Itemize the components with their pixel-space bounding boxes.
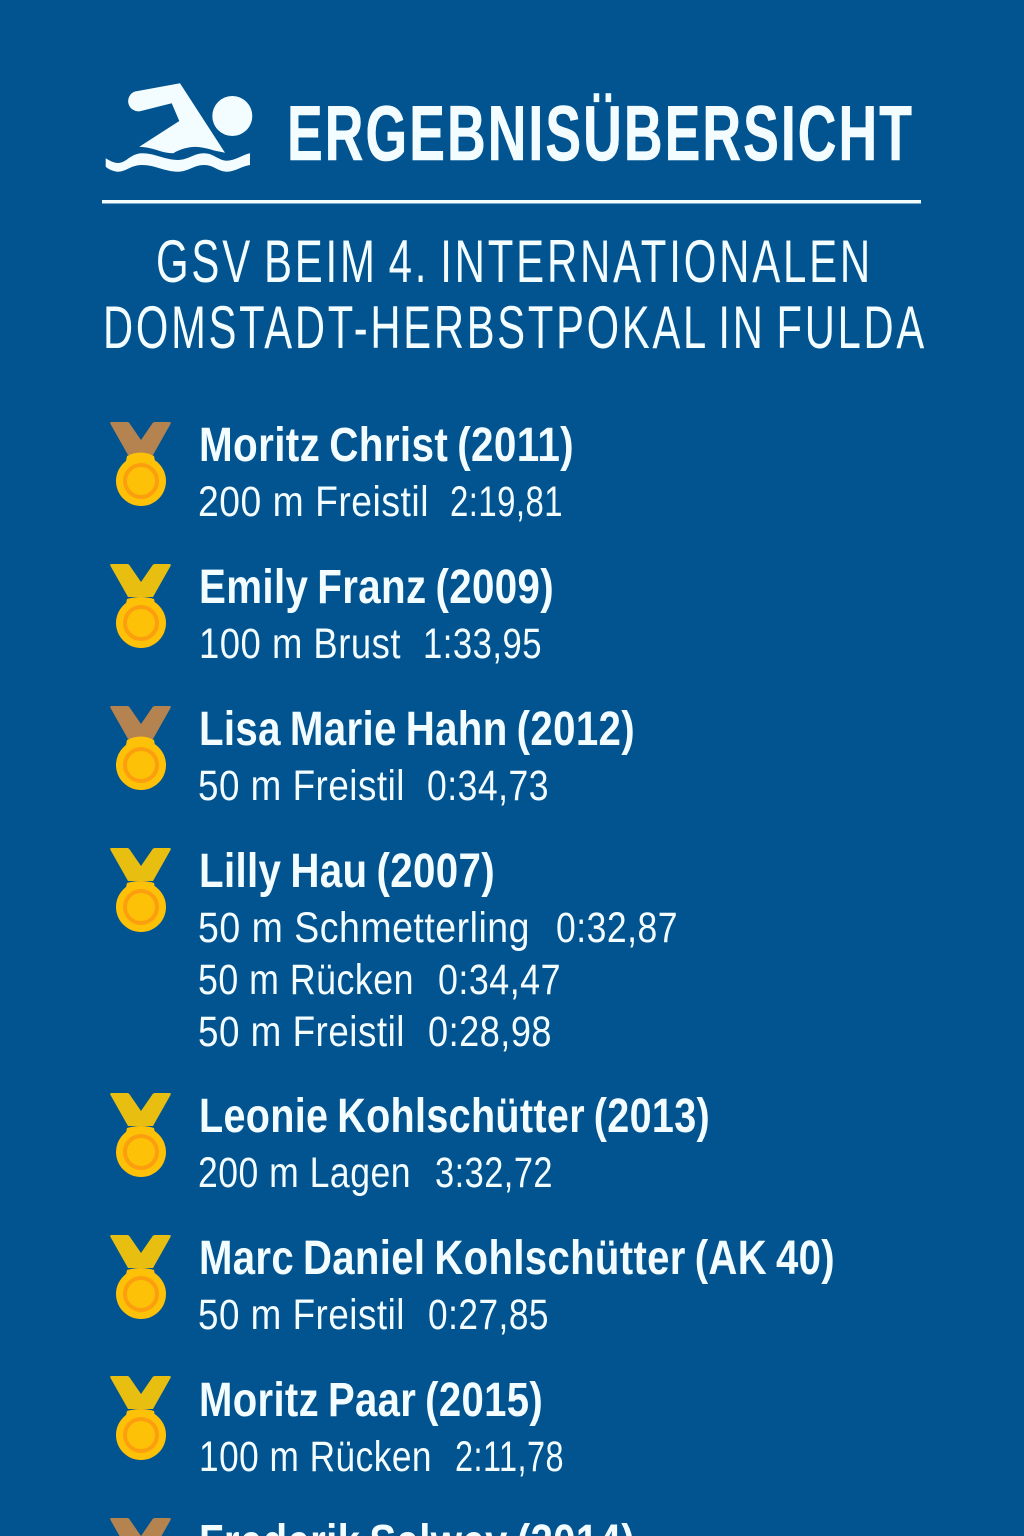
icon: gold ribbon medal [110,1376,171,1460]
result: Emily Franz: Emily Franz (2009) [199,561,554,614]
result: Moritz Paar: 100 m Rücken [199,1433,432,1481]
result: Lilly Hau: Lilly Hau (2007) [199,845,495,898]
result: Leonie Kohlschütter [110,1090,710,1197]
result: Moritz Christ: 200 m Freistil [198,478,429,526]
result: Marc Daniel Kohlschütter: 0:27,85 [428,1291,549,1339]
result: Leonie Kohlschütter: 3:32,72 [435,1149,553,1197]
icon: swimmer [106,83,252,172]
icon: gold ribbon medal [110,1235,171,1319]
result: Emily Franz [110,561,554,668]
result: Leonie Kohlschütter: 200 m Lagen [198,1149,411,1197]
result: Emily Franz: 100 m Brust [199,620,401,668]
icon: bronze ribbon medal [110,1518,171,1536]
divider line [102,200,921,204]
result: Moritz Paar: 2:11,78 [455,1433,564,1481]
result: Lilly Hau: 0:34,47 [438,956,561,1004]
result: Leonie Kohlschütter: Leonie Kohlschütter (2013) [199,1090,710,1143]
result: Moritz Paar: Moritz Paar (2015) [199,1374,543,1427]
icon: bronze ribbon medal [110,706,171,790]
result: Moritz Paar [110,1374,564,1481]
result: Lilly Hau: 0:28,98 [428,1008,552,1056]
result: Lisa Marie Hahn: 50 m Freistil [198,762,405,810]
result: Lisa Marie Hahn [110,703,635,810]
result: Lisa Marie Hahn: 0:34,73 [427,762,549,810]
result: Lisa Marie Hahn: Lisa Marie Hahn (2012) [199,703,635,756]
icon: bronze ribbon medal [110,422,171,506]
result: Marc Daniel Kohlschütter: Marc Daniel Kohlschütter (AK 40) [199,1232,835,1285]
result: Lilly Hau: 50 m Schmetterling [198,904,530,952]
result: Marc Daniel Kohlschütter: 50 m Freistil [198,1291,405,1339]
result: Lilly Hau: 50 m Rücken [198,956,414,1004]
icon: gold ribbon medal [110,848,171,932]
result: Lilly Hau: 50 m Freistil [198,1008,405,1056]
result: Marc Daniel Kohlschütter [110,1232,835,1339]
result: Lilly Hau [110,845,678,1056]
result: Moritz Christ: Moritz Christ (2011) [199,419,574,472]
icon: gold ribbon medal [110,564,171,648]
icon: gold ribbon medal [110,1093,171,1177]
result: Moritz Christ [110,419,574,526]
result: Lilly Hau: 0:32,87 [556,904,678,952]
result: Moritz Christ: 2:19,81 [450,478,563,526]
subtitle [103,228,927,361]
result: Emily Franz: 1:33,95 [423,620,542,668]
